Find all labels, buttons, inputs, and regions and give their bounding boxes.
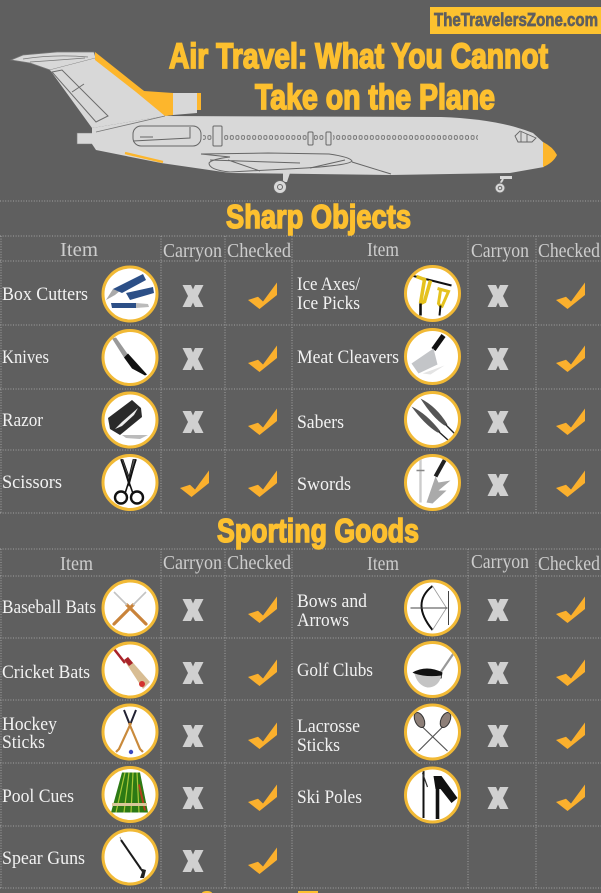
- row: bows and arrows: [297, 581, 585, 635]
- row: razor: [2, 393, 277, 447]
- row: box cutters: [2, 267, 277, 321]
- row: meat cleavers: Meat Cleavers: [297, 347, 399, 368]
- row: golf clubs: [297, 642, 585, 696]
- table headers: sharp objects: Item: [60, 239, 98, 261]
- row: cricket bats: Cricket Bats: [2, 662, 90, 683]
- row: hockey sticks: Hockey: [2, 714, 57, 735]
- row: ice axes: Ice Axes/: [297, 274, 361, 295]
- row: bows and arrows: Arrows: [297, 610, 349, 631]
- table headers: sporting goods: Carryon: [163, 552, 222, 574]
- row: knives: [2, 330, 277, 384]
- table headers: sporting goods: [60, 551, 600, 575]
- row: cricket bats: [2, 643, 277, 697]
- row: pool cues: [2, 768, 277, 822]
- row: lacrosse sticks: [297, 705, 585, 759]
- row: bows and arrows: Bows and: [297, 591, 367, 612]
- row: spear guns: [2, 830, 277, 884]
- row: box cutters: Box Cutters: [2, 284, 88, 305]
- row: knives: Knives: [2, 347, 49, 368]
- table headers: sharp objects: Carryon: [471, 240, 529, 262]
- title: Take on the Plane: [255, 78, 495, 117]
- row: ski poles: [297, 768, 585, 822]
- row: hockey sticks: Sticks: [2, 732, 45, 753]
- row: meat cleavers: [297, 330, 585, 384]
- row: pool cues: Pool Cues: [2, 786, 74, 807]
- row: swords: [297, 456, 585, 510]
- table headers: sharp objects: Carryon: [163, 240, 222, 262]
- row: ice axes: Ice Picks: [297, 293, 360, 314]
- table headers: sharp objects: [60, 239, 600, 262]
- row: ice axes: [297, 266, 585, 320]
- row: razor: Razor: [2, 410, 44, 431]
- row: scissors: [2, 456, 277, 510]
- row: ski poles: Ski Poles: [297, 787, 362, 808]
- table headers: sporting goods: Checked: [227, 552, 291, 574]
- table headers: sporting goods: Carryon: [471, 551, 529, 573]
- table headers: sporting goods: Item: [60, 553, 93, 575]
- heading: sharp objects: Sharp Objects: [226, 198, 411, 235]
- table headers: sharp objects: Item: [367, 239, 399, 261]
- row: sabers: Sabers: [297, 412, 344, 433]
- row: swords: Swords: [297, 474, 351, 495]
- illustration: airplane: [11, 52, 557, 194]
- row: golf clubs: Golf Clubs: [297, 660, 373, 681]
- table headers: sharp objects: Checked: [227, 240, 291, 262]
- row: baseball bats: Baseball Bats: [2, 597, 96, 618]
- row: scissors: Scissors: [2, 472, 62, 493]
- row: lacrosse sticks: Lacrosse: [297, 716, 360, 737]
- row: sabers: [297, 392, 585, 446]
- heading: sporting goods: Sporting Goods: [217, 512, 419, 549]
- row: hockey sticks: [2, 705, 277, 759]
- title: [169, 37, 548, 117]
- row: baseball bats: [2, 581, 277, 635]
- next heading peeking at the bottom edge: [202, 891, 318, 893]
- row: spear guns: Spear Guns: [2, 848, 85, 869]
- table headers: sporting goods: Item: [367, 553, 399, 575]
- row: lacrosse sticks: Sticks: [297, 735, 340, 756]
